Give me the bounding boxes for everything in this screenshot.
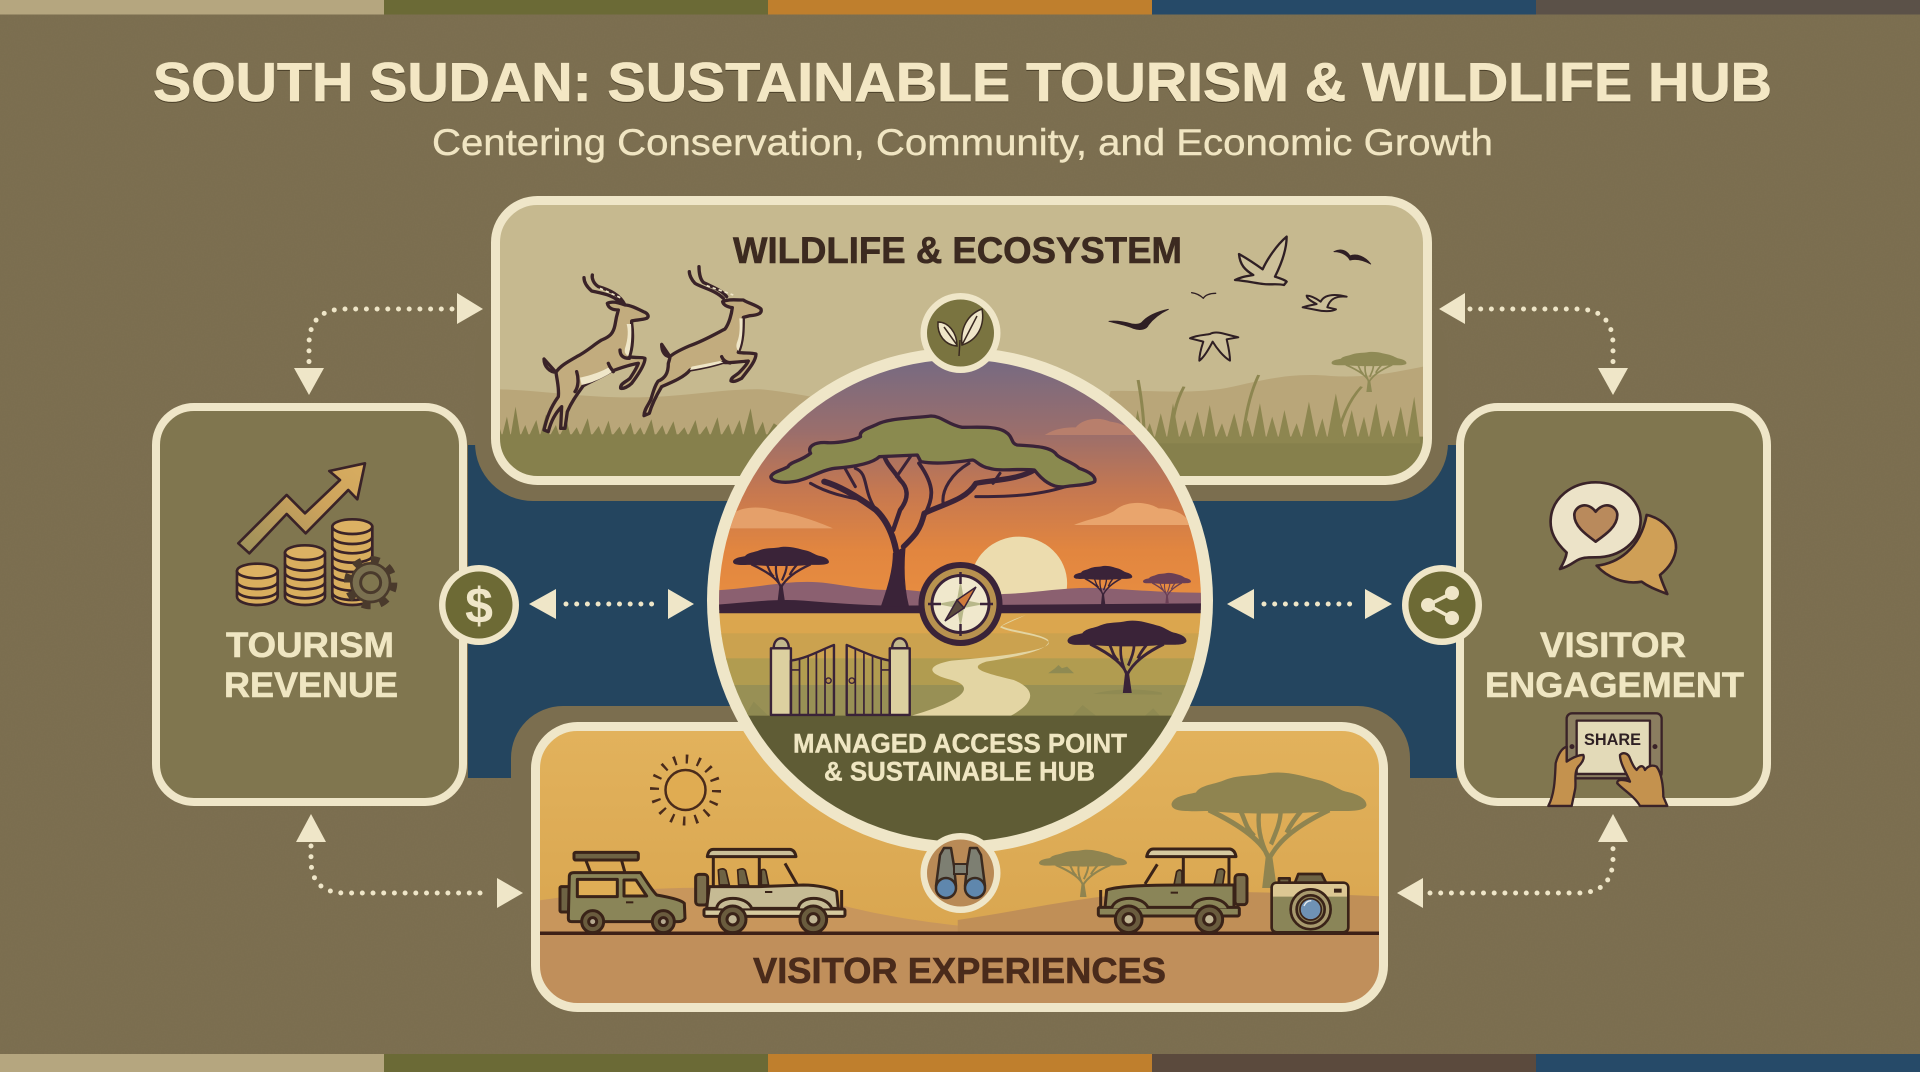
grass tufts bbox=[745, 665, 1162, 716]
heading: wildlife and ecosystem: WILDLIFE & ECOSYSTEM bbox=[733, 230, 1182, 271]
arrow: visitor experiences to engagement bbox=[1397, 814, 1628, 908]
top colour bar bbox=[0, 0, 1920, 14]
ground foreground bbox=[748, 716, 1172, 840]
icon: tablet with share button and hands bbox=[1548, 713, 1667, 806]
panel: visitor engagement bbox=[1460, 407, 1767, 806]
panel: visitor experiences bbox=[530, 726, 1390, 1013]
label: visitor engagement: VISITOR bbox=[1540, 626, 1686, 665]
icon: park gates bbox=[771, 638, 910, 715]
title: SOUTH SUDAN: SUSTAINABLE TOURISM & WILDLIFE HUB bbox=[153, 51, 1772, 113]
icon: closed safari vehicle bbox=[560, 852, 685, 933]
badge: binoculars bbox=[920, 833, 1000, 913]
icon: background acacia trees bbox=[1039, 772, 1366, 897]
label: tourism revenue bbox=[224, 626, 398, 705]
icon: tablet with share button and hands: SHARE bbox=[1584, 730, 1641, 749]
setting sun bbox=[974, 536, 1068, 594]
icon: camera bbox=[1272, 874, 1348, 932]
winding road bbox=[910, 615, 1049, 716]
icon: flying birds bbox=[1109, 237, 1371, 361]
icon: speech bubbles with heart bbox=[1551, 482, 1676, 594]
badge: leaf bbox=[920, 293, 1000, 373]
icon: olive safari jeep bbox=[1098, 849, 1247, 933]
arrow: hub to visitor engagement bbox=[1227, 589, 1392, 619]
icon: large acacia tree bbox=[771, 416, 1095, 607]
icon: small acacia trees bbox=[733, 547, 1191, 693]
bottom colour bar bbox=[0, 1054, 1920, 1072]
label: visitor engagement: ENGAGEMENT bbox=[1485, 666, 1744, 705]
label: managed access point and sustainable hub bbox=[793, 729, 1127, 787]
badge: share bbox=[1402, 565, 1482, 645]
label: tourism revenue: TOURISM bbox=[226, 626, 394, 665]
icon: compass bbox=[918, 562, 1002, 646]
icon: sun bbox=[654, 759, 716, 821]
dark horizon bbox=[711, 600, 1210, 613]
savanna ground bands bbox=[711, 612, 1213, 717]
panel: wildlife and ecosystem bbox=[492, 200, 1435, 481]
label: tourism revenue: REVENUE bbox=[224, 666, 398, 705]
icon: savanna tree bbox=[1332, 352, 1406, 392]
icon: leaping gazelles bbox=[544, 267, 761, 432]
arrow: tourism to wildlife bbox=[294, 293, 483, 395]
clouds bbox=[724, 419, 1191, 528]
arrow: wildlife to engagement bbox=[1439, 293, 1628, 395]
halo behind visitor panel bbox=[511, 706, 1410, 906]
label: managed access point and sustainable hub: & SUSTAINABLE HUB bbox=[824, 757, 1095, 787]
badge: dollar: $ bbox=[465, 578, 493, 634]
halo behind wildlife panel bbox=[475, 300, 1448, 501]
road line bbox=[530, 932, 1390, 935]
heading: visitor experiences: VISITOR EXPERIENCES bbox=[753, 950, 1166, 991]
navy connecting band bbox=[468, 445, 1457, 778]
subtitle: Centering Conservation, Community, and Economic Growth bbox=[432, 122, 1493, 163]
arrow: hub to tourism revenue bbox=[529, 589, 694, 619]
panel: tourism revenue bbox=[156, 407, 463, 802]
label: managed access point and sustainable hub: MANAGED ACCESS POINT bbox=[793, 729, 1127, 759]
icon: growth chart with coins and gear bbox=[237, 463, 394, 606]
icon: open safari jeep bbox=[696, 849, 845, 933]
arrow: tourism to visitor experiences bbox=[296, 814, 523, 908]
badge: dollar bbox=[439, 565, 519, 645]
purple hills bbox=[711, 582, 1210, 610]
central hub circle bbox=[700, 348, 1220, 856]
label: visitor engagement bbox=[1485, 626, 1744, 705]
